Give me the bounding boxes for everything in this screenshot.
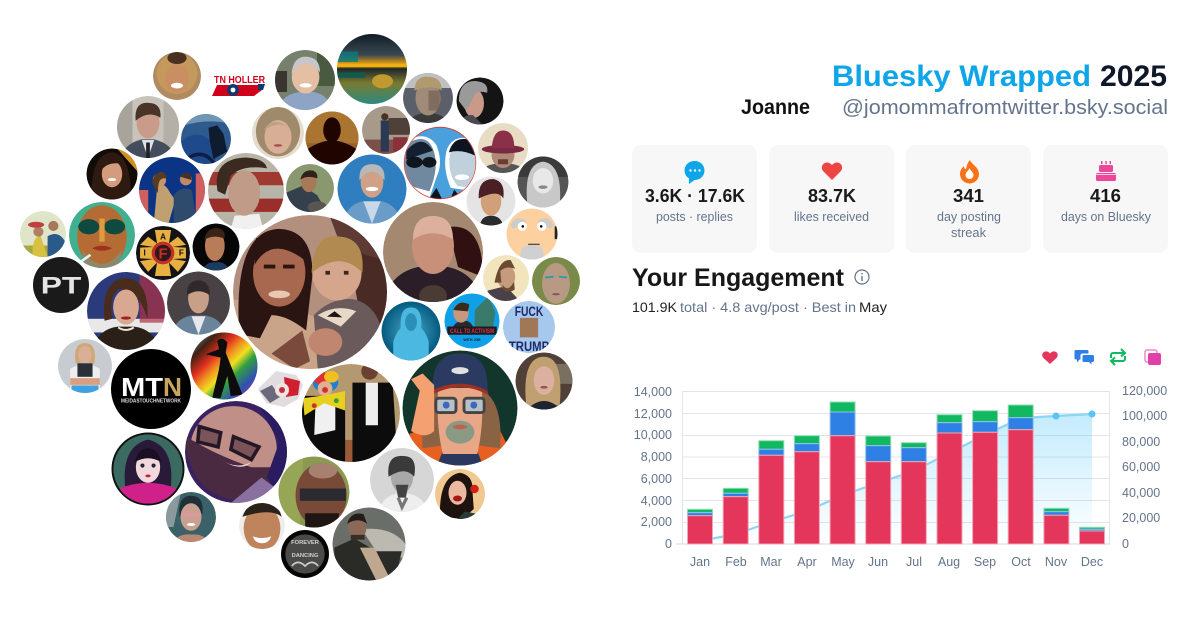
stat card: streak: 341 — [953, 186, 984, 206]
left axis labels: 8,000 — [641, 450, 672, 464]
icon: replies legend — [1074, 350, 1094, 364]
avatar: man with glasses, purple tint — [185, 401, 287, 503]
stat card: likes: 83.7K — [808, 186, 856, 206]
avatar: silhouette placeholder — [306, 112, 358, 164]
avatar: blonde woman — [153, 52, 201, 100]
chart legend — [1042, 349, 1161, 365]
bar: Jan — [688, 509, 712, 544]
avatar: blonde woman right side — [516, 352, 572, 410]
avatar: blue horse painting — [181, 114, 231, 164]
avatar: blonde woman black and white — [518, 156, 568, 208]
avatar: man with dog outdoors — [286, 164, 334, 213]
bar: Oct — [1008, 405, 1033, 544]
left axis labels: 2,000 — [641, 515, 672, 529]
bar: Feb — [723, 488, 748, 544]
stat card: streak — [906, 145, 1031, 253]
icon: quotes legend — [1145, 350, 1161, 365]
avatar: rainbow silhouette — [190, 332, 258, 400]
right axis labels: 40,000 — [1122, 486, 1160, 500]
avatar: young man with flag — [208, 153, 284, 229]
month labels: Oct — [1011, 555, 1031, 569]
right axis labels: 100,000 — [1122, 409, 1167, 423]
avatar: hooded figure — [382, 302, 440, 360]
avatar: woman soft green tones — [532, 257, 580, 305]
left axis labels: 12,000 — [634, 407, 672, 421]
avatar: Broncos cartoon man — [402, 350, 518, 466]
icon: cake — [1096, 161, 1116, 181]
avatar: US Canada flags fist — [258, 371, 303, 407]
engagement summary: total · 4.8 avg/post · Best in — [680, 299, 856, 315]
stat card: days on Bluesky: 416 — [1090, 186, 1121, 206]
logo: MeidasTouch Network: N — [163, 372, 182, 402]
right axis labels: 80,000 — [1122, 435, 1160, 449]
avatar: main large photo of mother and child — [233, 215, 387, 369]
stat card: posts and replies — [632, 145, 757, 253]
avatar: man black and white portrait — [370, 448, 434, 512]
avatar: blond man — [403, 73, 453, 123]
left axis labels: 4,000 — [641, 494, 672, 508]
bar: Aug — [937, 415, 962, 544]
stat card: likes — [769, 145, 894, 253]
avatar: man with sunglasses in foliage — [278, 456, 350, 528]
month labels: May — [831, 555, 856, 569]
avatar: woman with dark hair — [86, 148, 138, 200]
logo: MeidasTouch Network: MEIDASTOUCHNETWORK — [121, 398, 181, 404]
bar: Sep — [973, 411, 998, 544]
avatar: woman in living room — [362, 106, 410, 154]
month labels: Sep — [974, 555, 996, 569]
stat card: posts and replies: 3.6K · 17.6K — [645, 186, 745, 206]
avatar: clown and man in tuxedos — [302, 363, 400, 462]
left axis labels: 14,000 — [634, 385, 672, 399]
month labels: Mar — [760, 555, 782, 569]
left axis labels: 10,000 — [634, 428, 672, 442]
avatar: blonde woman close-up — [252, 107, 304, 159]
bar: Apr — [794, 436, 819, 544]
avatar: bearded man with glasses — [483, 255, 529, 301]
icon: heart — [822, 162, 842, 180]
avatar: couple in hats — [20, 211, 66, 257]
avatar: pink sweater illustration — [112, 432, 184, 506]
logo: TN Holler — [212, 74, 265, 96]
icon: reposts legend — [1111, 349, 1125, 365]
avatar: sunset over water — [337, 34, 407, 104]
avatar: man in dark coat — [332, 508, 406, 580]
logo: MeidasTouch Network — [111, 349, 191, 429]
month labels: Apr — [797, 555, 817, 569]
engagement summary: 101.9K — [632, 299, 678, 315]
combo chart: monthly engagement — [634, 384, 1167, 569]
bar: Jul — [901, 443, 926, 544]
cumulative area — [700, 414, 1092, 544]
avatar: smiling Asian man — [239, 503, 285, 551]
avatar: bald man big — [383, 202, 483, 307]
icon: info — [855, 270, 869, 284]
avatar: Call to Activism — [444, 294, 500, 348]
avatar: PT logo — [33, 257, 89, 313]
right axis labels: 20,000 — [1122, 511, 1160, 525]
avatar: man in blazer — [167, 272, 230, 334]
avatar: cartoon man — [466, 176, 516, 226]
month labels: Jan — [690, 555, 710, 569]
icon: likes legend — [1042, 351, 1058, 364]
avatar: woman in car — [166, 492, 216, 542]
bar: Jun — [866, 436, 891, 544]
logo: TN Holler: TN HOLLER — [214, 74, 265, 86]
stacked bars — [688, 402, 1104, 544]
left axis labels — [634, 385, 672, 551]
avatar: smiling man blue background — [338, 154, 406, 224]
bar: May — [830, 402, 855, 544]
stat card: days on Bluesky — [1043, 145, 1168, 253]
month labels: Aug — [938, 555, 960, 569]
avatar: painted war-paint man — [69, 202, 135, 268]
handle: @jomommafromtwitter.bsky.social — [842, 97, 1168, 119]
right axis labels: 0 — [1122, 537, 1129, 551]
avatar: blonde woman holding book — [58, 339, 112, 394]
stat card: streak: day posting — [937, 210, 1001, 224]
month labels: Jun — [868, 555, 888, 569]
avatar: two men cartoon with red ring — [404, 127, 476, 199]
right axis labels — [1122, 384, 1167, 551]
cumulative line — [700, 410, 1096, 541]
logo: MeidasTouch Network: MT — [121, 372, 163, 402]
stat card: likes: likes received — [794, 210, 869, 224]
bar: Dec — [1080, 527, 1104, 544]
right axis labels: 120,000 — [1122, 384, 1167, 398]
title: Bluesky Wrapped — [832, 60, 1091, 93]
bar: Mar — [759, 441, 784, 544]
icon: chat bubble — [685, 161, 704, 184]
avatar cluster — [20, 34, 580, 580]
avatar: IAFF firefighters logo — [136, 226, 190, 280]
heading: Your Engagement: Your Engagement — [632, 264, 845, 292]
stat card: days on Bluesky: days on Bluesky — [1061, 210, 1152, 224]
display name: Joanne — [741, 96, 810, 119]
engagement summary: May — [859, 299, 887, 315]
engagement summary — [632, 299, 887, 315]
avatar: older man with white hair — [275, 50, 335, 110]
month labels: Nov — [1045, 555, 1068, 569]
month labels — [690, 555, 1103, 569]
avatar: man in maroon hat — [478, 123, 528, 173]
left axis labels: 0 — [665, 537, 672, 551]
avatar: grey-haired man in profile — [456, 78, 504, 124]
icon: flame — [960, 160, 979, 184]
avatar: Forever Dancing logo — [281, 530, 329, 578]
bar: Nov — [1044, 508, 1069, 544]
avatar: cartoon Rick — [506, 208, 558, 260]
stat card: streak: streak — [951, 226, 987, 240]
right axis labels: 60,000 — [1122, 460, 1160, 474]
avatar: man on black background — [192, 224, 240, 270]
month labels: Feb — [725, 555, 747, 569]
avatar: man in suit — [117, 96, 179, 158]
stat card: posts and replies: posts · replies — [656, 210, 733, 224]
avatar: laughing woman — [435, 469, 485, 519]
title: 2025 — [1100, 60, 1167, 93]
left axis labels: 6,000 — [641, 472, 672, 486]
month labels: Dec — [1081, 555, 1103, 569]
avatar: woman with American flag — [87, 272, 167, 350]
month labels: Jul — [906, 555, 922, 569]
avatar: Fuck Trump — [503, 301, 555, 354]
avatar: two people shaking hands with flags — [139, 157, 205, 223]
